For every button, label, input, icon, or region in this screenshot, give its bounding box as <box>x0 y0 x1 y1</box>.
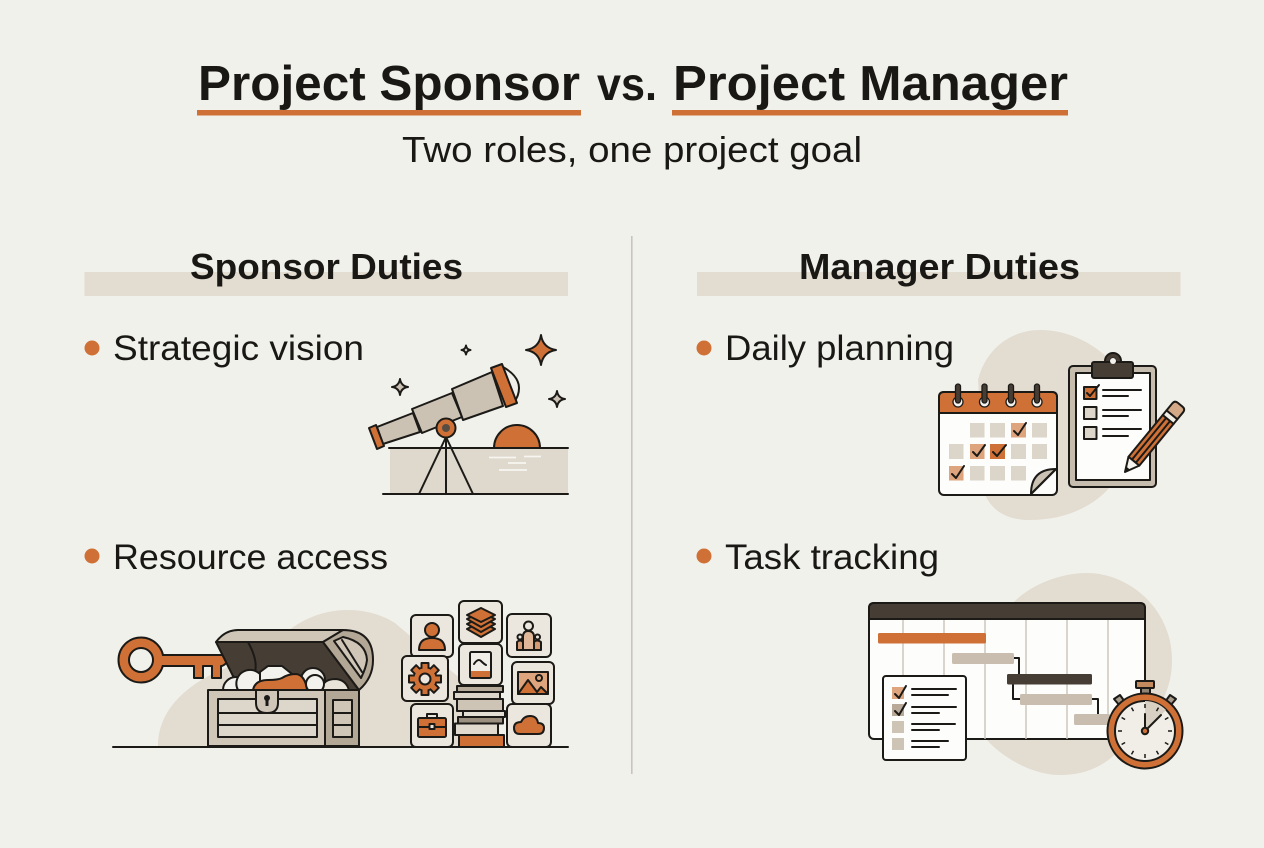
background blob: tracking <box>987 573 1172 775</box>
bullet: strategic vision: Strategic vision <box>113 329 364 368</box>
icon: cloud tile <box>507 704 551 747</box>
icon: briefcase tile <box>411 704 453 747</box>
icon: calendar <box>939 384 1057 495</box>
icon: book stack <box>454 686 505 747</box>
title <box>197 57 1068 116</box>
icon: layers tile <box>459 601 502 643</box>
chart: gantt timeline <box>869 603 1145 739</box>
bullet: daily planning: Daily planning <box>725 329 954 368</box>
title: Project Sponsor <box>198 57 580 111</box>
heading: manager duties: Manager Duties <box>799 246 1080 287</box>
icon: clipboard with pencil <box>1069 353 1186 487</box>
bullet: task tracking: Task tracking <box>725 538 939 577</box>
icon: gear tile <box>402 656 448 701</box>
icon: image tile <box>512 662 554 704</box>
heading: sponsor duties: Sponsor Duties <box>190 246 463 287</box>
title: vs. <box>597 58 657 110</box>
icon: telescope at sunrise <box>369 335 568 494</box>
icon group: resource tiles and books <box>402 601 554 747</box>
background blob: planning <box>978 330 1110 520</box>
icon: person tile <box>411 615 453 657</box>
heading: manager duties <box>697 246 1180 296</box>
icon: task checklist <box>883 676 966 760</box>
panel: manager duties <box>696 246 1186 775</box>
icon: team tile <box>507 614 551 657</box>
background blob: resources <box>158 610 462 746</box>
subtitle: Two roles, one project goal <box>402 129 862 170</box>
icon: stopwatch <box>1108 681 1182 768</box>
heading: sponsor duties <box>84 246 568 296</box>
bullet: resource access: Resource access <box>113 538 388 577</box>
icon: document tile <box>459 644 502 685</box>
icon: treasure chest <box>208 630 373 746</box>
title: Project Manager <box>673 57 1068 111</box>
panel: sponsor duties <box>84 246 568 747</box>
icon: key <box>118 638 227 682</box>
